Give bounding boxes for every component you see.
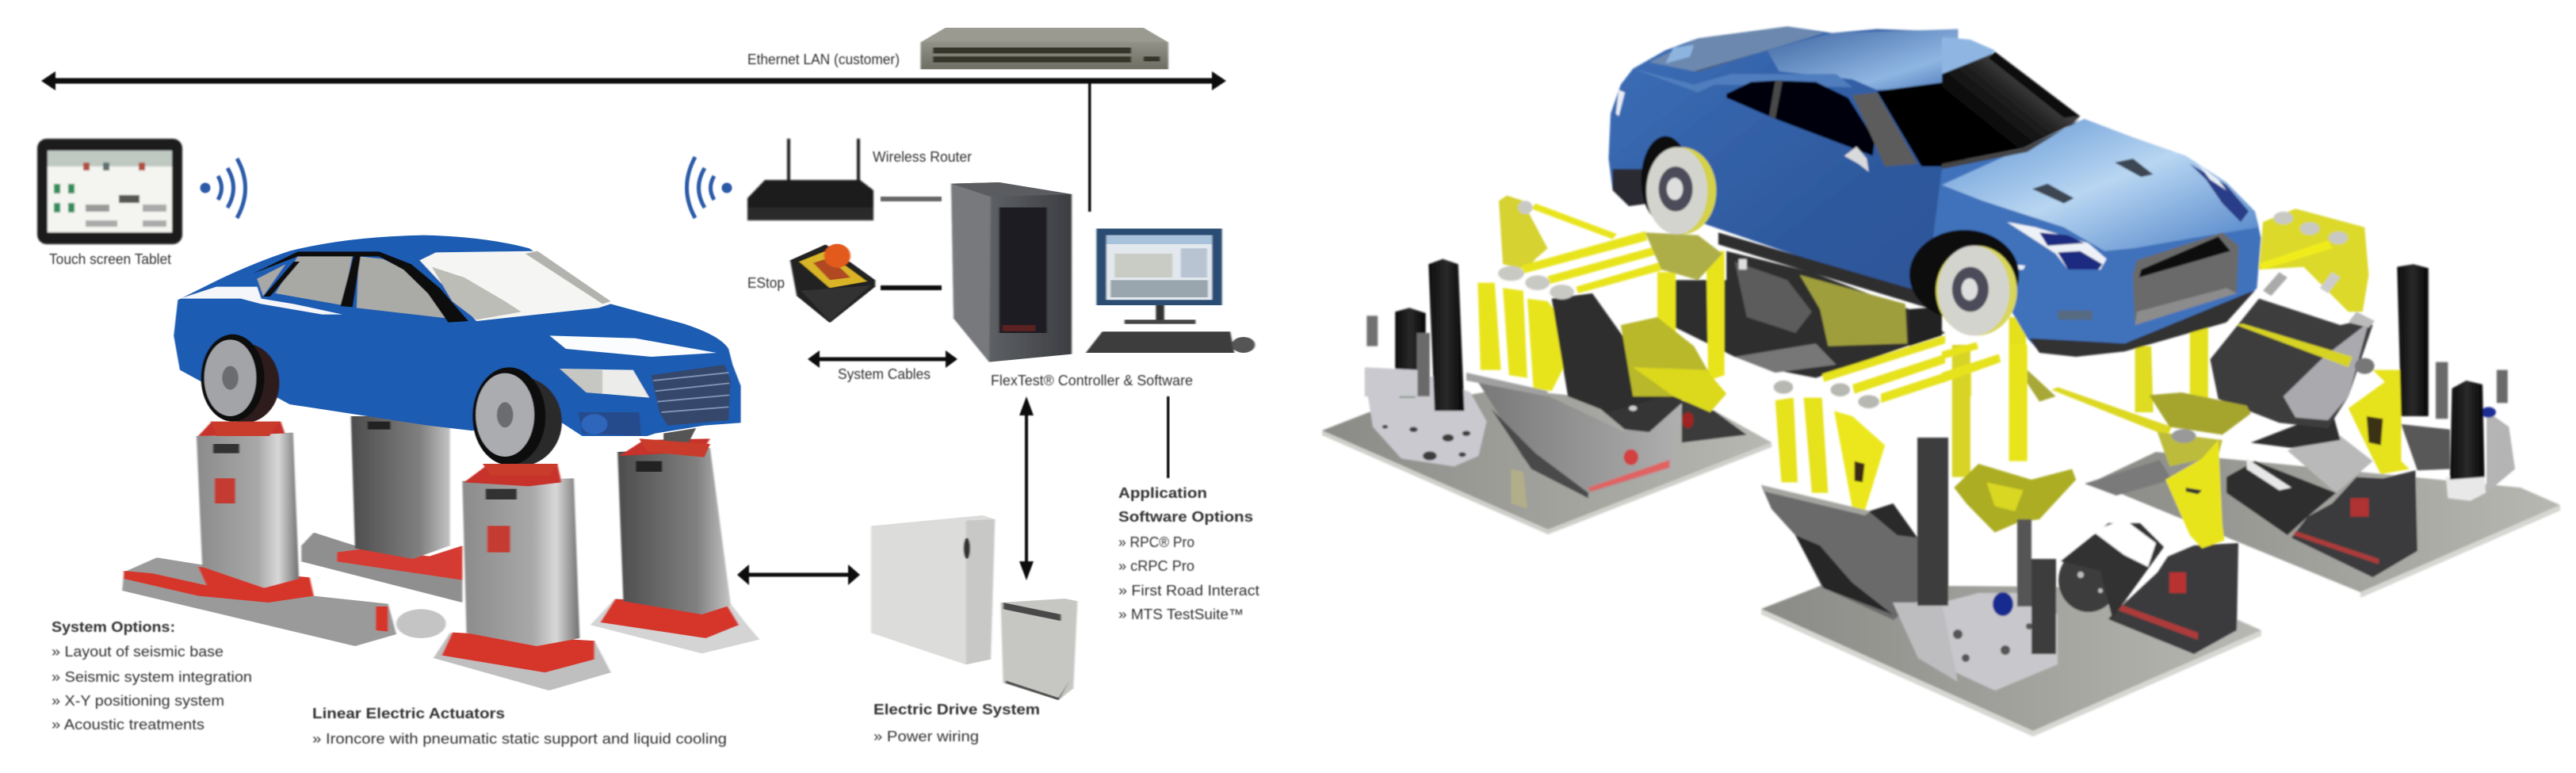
arrow: controller to drive system [1019,396,1034,580]
arrow: actuators to drive system [737,564,860,585]
icon: computer monitor and keyboard [1086,228,1255,353]
text block: linear electric actuators [312,706,727,747]
ethernet label: Ethernet LAN (customer) [747,52,900,67]
tablet label: Touch screen Tablet [49,251,171,267]
text block: system options: System Options: [52,619,175,635]
text block: application software options: » RPC® Pro [1118,534,1194,550]
icon: wireless router [747,139,873,220]
right yellow frame and machinery [1954,209,2410,474]
text block: electric drive system [873,702,1040,744]
rear-left yellow suspension [1466,196,1726,412]
arrow: ethernet LAN [41,71,1226,212]
front dark tubes [1917,438,2056,654]
text block: linear electric actuators: » Ironcore with pneumatic static support and liquid cooling [312,731,727,747]
front yellow suspension [1952,345,2251,549]
text block: application software options: » cRPC Pro [1118,558,1194,574]
connector: software options [1167,396,1170,478]
text block: system options [52,619,252,733]
ethernet switch [920,28,1168,69]
cable: estop to controller [881,285,942,290]
icon: estop box [790,244,875,323]
text block: application software options: » MTS TestSuite™ [1118,607,1244,622]
under-car machinery [1676,251,1945,378]
text block: application software options: Software Options [1118,509,1253,525]
icon: flextest controller tower [951,182,1072,362]
text block: system options: » X-Y positioning system [52,693,224,709]
system cables label: System Cables [838,366,931,382]
panel: 3D rig rendering [1322,26,2560,737]
rear-left actuator station [1365,377,1747,509]
right-rear actuator station [2226,407,2515,577]
icon: wifi signal tablet [200,159,246,218]
icon: wifi signal router [686,157,732,218]
base plates [1322,388,2560,737]
panel: system diagram [37,28,1259,747]
text block: electric drive system: Electric Drive System [873,702,1040,718]
estop label: EStop [747,275,785,291]
text block: linear electric actuators: Linear Electric Actuators [312,706,505,721]
right dark tubes [2397,264,2508,480]
front rods [1822,335,1945,403]
text block: electric drive system: » Power wiring [873,729,979,744]
text block: application software options: Application [1118,485,1207,501]
text block: system options: » Acoustic treatments [52,717,204,733]
illustration: blue sports car [1608,26,2261,357]
text block: system options: » Layout of seismic base [52,644,224,660]
rear-left tubes [1365,259,1464,411]
text block: application software options: » First Road Interact [1118,583,1259,599]
icon: electric drive cabinets [871,515,1077,700]
front actuator station [1761,460,2238,691]
wireless router label: Wireless Router [873,149,972,165]
controller label: FlexTest® Controller & Software [991,373,1193,388]
arrow: system cables [808,350,957,368]
cable: router to controller [881,197,942,201]
illustration: blue car [174,235,741,476]
text block: system options: » Seismic system integration [52,669,252,685]
icon: touch screen tablet [37,139,182,244]
text block: application software options [1118,485,1259,622]
illustration: linear electric actuators [122,416,759,691]
